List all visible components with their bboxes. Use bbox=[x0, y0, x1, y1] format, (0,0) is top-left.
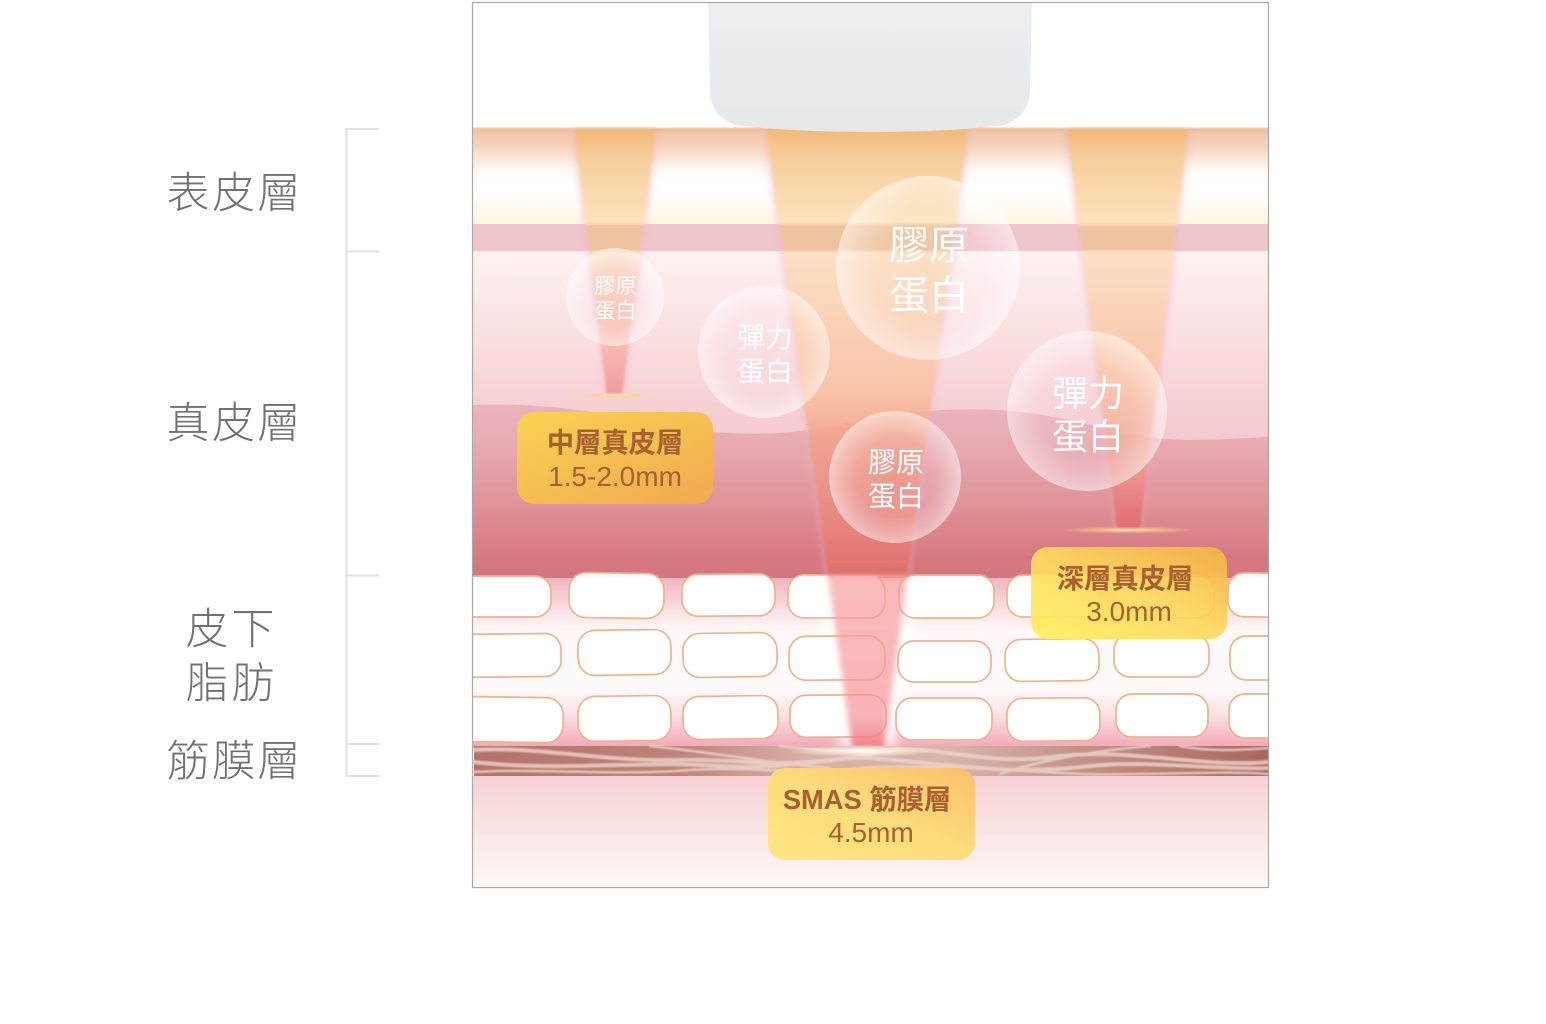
bubble: elastin left: 蛋白 bbox=[737, 356, 793, 387]
wave tint across beams bbox=[473, 404, 1269, 578]
bubble: collagen lower: 膠原 bbox=[868, 447, 924, 478]
top skin line bbox=[473, 128, 1269, 129]
row 2 bbox=[473, 632, 562, 678]
deep dermis with wave edge bbox=[473, 404, 1269, 578]
fat cells bbox=[440, 572, 1300, 743]
focal glow: fascia bbox=[794, 746, 925, 756]
bubble: collagen large: 蛋白 bbox=[889, 274, 969, 318]
panel: skin cross-section bbox=[440, 0, 1300, 888]
depth tag: SMAS fascia: 4.5mm bbox=[828, 817, 914, 848]
panel frame bbox=[472, 2, 1268, 888]
row 3 bbox=[473, 696, 564, 744]
bubble: collagen small: 蛋白 bbox=[594, 300, 636, 323]
label: epidermis: 表皮層 bbox=[166, 170, 303, 218]
layer brackets bbox=[346, 129, 379, 776]
bubble: collagen large: 膠原 bbox=[889, 224, 969, 268]
ultrasound beam: fascia, fat section bbox=[825, 578, 910, 746]
subcutaneous fat background bbox=[473, 578, 1269, 748]
label: dermis: 真皮層 bbox=[166, 400, 303, 448]
depth tag: deep dermis: 深層真皮層 bbox=[1057, 563, 1193, 594]
row 1 bbox=[473, 575, 552, 618]
bubble: collagen lower bbox=[829, 411, 961, 543]
fascia fibres bbox=[474, 746, 1269, 774]
depth tag: mid dermis: 1.5-2.0mm bbox=[548, 461, 682, 492]
focal glow: shallow bbox=[570, 392, 660, 398]
depth tag: SMAS fascia: SMAS 筋膜層 bbox=[783, 784, 951, 815]
fascia layer bbox=[474, 746, 1269, 776]
basal band bbox=[473, 224, 1269, 252]
bubble: elastin left: 彈力 bbox=[737, 322, 793, 353]
depth tag: SMAS fascia bbox=[768, 768, 975, 860]
pink halo along beams bbox=[570, 128, 1192, 578]
bubble: collagen large bbox=[836, 176, 1020, 360]
ultrasound beam: fascia, dermis section bbox=[765, 129, 969, 578]
upper dermis layer bbox=[473, 251, 1268, 440]
label: subcutaneous fat bbox=[186, 606, 278, 708]
depth tag: deep dermis bbox=[1031, 547, 1227, 639]
bubble: elastin right bbox=[1007, 331, 1167, 491]
bubble: elastin right: 蛋白 bbox=[1052, 416, 1124, 457]
epidermis layer bbox=[473, 128, 1269, 224]
label: subcutaneous fat: 脂肪 bbox=[186, 660, 278, 708]
white halo along beam in fat bbox=[821, 578, 914, 746]
ultrasound probe bbox=[708, 0, 1032, 132]
ultrasound beam: shallow bbox=[574, 128, 656, 395]
bubble: elastin left bbox=[698, 286, 830, 418]
depth tag: mid dermis: 中層真皮層 bbox=[547, 427, 683, 458]
depth tag: mid dermis bbox=[517, 412, 713, 504]
white background above the skin bbox=[473, 3, 1268, 128]
bubble: collagen lower: 蛋白 bbox=[868, 481, 924, 512]
label column: skin layer names bbox=[166, 170, 303, 786]
bubble: collagen small bbox=[566, 248, 664, 346]
depth tag: deep dermis: 3.0mm bbox=[1086, 596, 1172, 627]
bubble: elastin right: 彈力 bbox=[1052, 373, 1124, 414]
label: fascia: 筋膜層 bbox=[166, 738, 303, 786]
bubble: collagen small: 膠原 bbox=[594, 275, 636, 298]
ultrasound beam: deep dermis bbox=[1067, 128, 1188, 530]
focal glow: deep dermis bbox=[1066, 526, 1190, 533]
tissue below fascia bbox=[473, 776, 1269, 888]
label: subcutaneous fat: 皮下 bbox=[186, 606, 278, 654]
